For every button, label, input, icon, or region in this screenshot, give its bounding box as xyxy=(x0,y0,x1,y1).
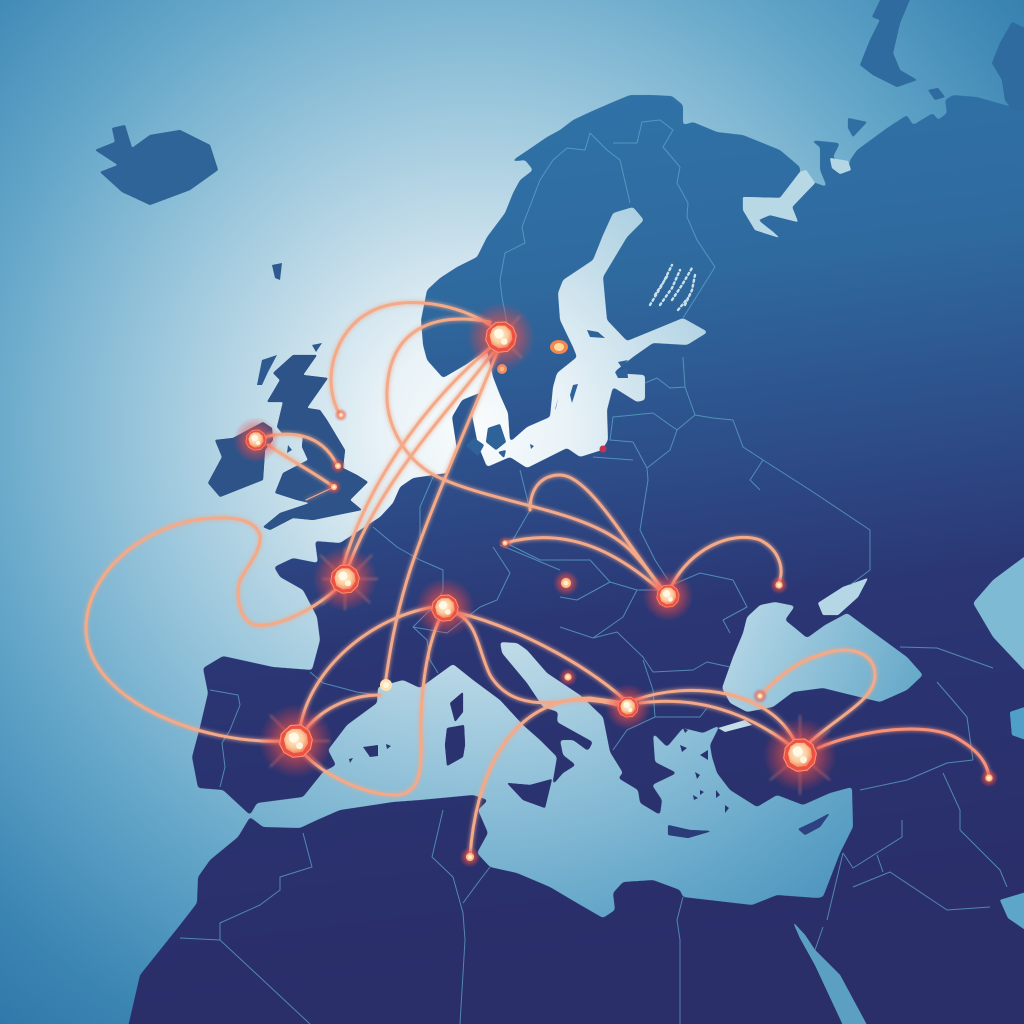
hub: Turkey xyxy=(763,718,837,792)
arc: Switzerland to Balkans direct xyxy=(455,612,625,700)
hub: Romania xyxy=(643,571,693,621)
arc: Norway to Romania xyxy=(387,319,662,590)
connection arcs xyxy=(86,302,989,856)
arc: Balkans to Turkey lower xyxy=(640,701,790,745)
node: Adriatic xyxy=(559,668,577,686)
hub: France xyxy=(313,547,377,611)
arc: Ireland to Britain 2 xyxy=(268,445,334,487)
hub rays xyxy=(262,316,830,795)
node: Tunisia xyxy=(460,847,480,867)
arc: Turkey loop over Black Sea xyxy=(760,650,875,742)
arc: Ireland to Britain 1 xyxy=(265,434,337,465)
Pechora Bay xyxy=(830,158,851,174)
arc: Romania loop to Poland xyxy=(530,475,662,588)
islands: Danish archipelago xyxy=(466,424,506,458)
arc: France over Atlantic to Spain xyxy=(86,518,335,741)
node: Sweden small xyxy=(497,364,507,374)
islands: Novaya Zemlya xyxy=(860,0,918,87)
hub: Balkans xyxy=(605,684,651,730)
arc: Turkey to the east xyxy=(818,729,989,778)
arc: Britain tail xyxy=(306,487,334,500)
island: Iceland xyxy=(95,125,218,205)
island: Crete xyxy=(668,825,712,838)
hub: Spain xyxy=(259,704,333,778)
arc: Norway to North Sea xyxy=(331,302,490,415)
White Sea xyxy=(720,170,815,238)
arc: Romania to Czechia xyxy=(505,538,660,590)
Red Sea and Gulf of Suez xyxy=(793,922,875,1024)
landmass: Eurasia and North Africa xyxy=(125,95,1024,1024)
island: Sardinia xyxy=(445,725,465,766)
island: Corsica xyxy=(450,692,463,722)
node: eastern Turkey xyxy=(980,769,998,787)
hub: Switzerland xyxy=(415,578,475,638)
arc: Spain through Mediterranean to Switzerland xyxy=(305,618,440,795)
node: Baltic red marker xyxy=(600,446,606,452)
node: Black Sea xyxy=(752,688,768,704)
arc: Switzerland to Balkans through Italy xyxy=(458,614,622,706)
island: Lesbos xyxy=(718,720,752,732)
islands: Aegean xyxy=(680,728,729,813)
island group: Hebrides and Shetland xyxy=(257,263,322,453)
node: northern England xyxy=(330,458,346,474)
arc: Norway to France 1 xyxy=(342,348,490,570)
islands: Balearics xyxy=(349,744,391,763)
arc: Norway to Gulf of Lion xyxy=(385,350,498,685)
land: Yamal peninsula xyxy=(928,22,1024,112)
arc: Spain to Switzerland xyxy=(300,606,440,728)
Sea of Azov xyxy=(818,578,868,615)
arc: Spain to Gulf of Lion xyxy=(305,695,380,730)
hub: Ireland xyxy=(233,417,279,463)
node: Gulf of Lion xyxy=(380,679,392,691)
node: Hungary xyxy=(553,570,579,596)
node: North Sea xyxy=(334,408,348,422)
node: Ukraine xyxy=(770,576,788,594)
arc: Tunisia to Balkans xyxy=(470,698,625,856)
Caspian Sea xyxy=(973,545,1024,680)
hub: Norway xyxy=(466,302,536,372)
island: Great Britain xyxy=(263,355,368,530)
southern Caspian xyxy=(1010,702,1024,745)
arc: Norway to France 2 xyxy=(348,350,495,568)
node: central England xyxy=(326,479,342,495)
arc: Romania to Ukraine xyxy=(672,537,781,585)
Persian Gulf xyxy=(1000,888,1024,940)
island: Cyprus xyxy=(798,813,830,835)
Black Sea xyxy=(722,602,923,712)
node: Czechia xyxy=(498,536,512,550)
islands: Baltic xyxy=(530,330,628,449)
arc: Balkans to Turkey upper xyxy=(635,690,795,742)
island: Ireland xyxy=(208,422,273,497)
island: Kolguev xyxy=(848,118,867,137)
national borders xyxy=(180,120,1007,1024)
island: Sicily xyxy=(507,779,552,808)
lakes: Finnish lake district xyxy=(650,265,695,310)
node: Sweden glow xyxy=(550,340,568,354)
